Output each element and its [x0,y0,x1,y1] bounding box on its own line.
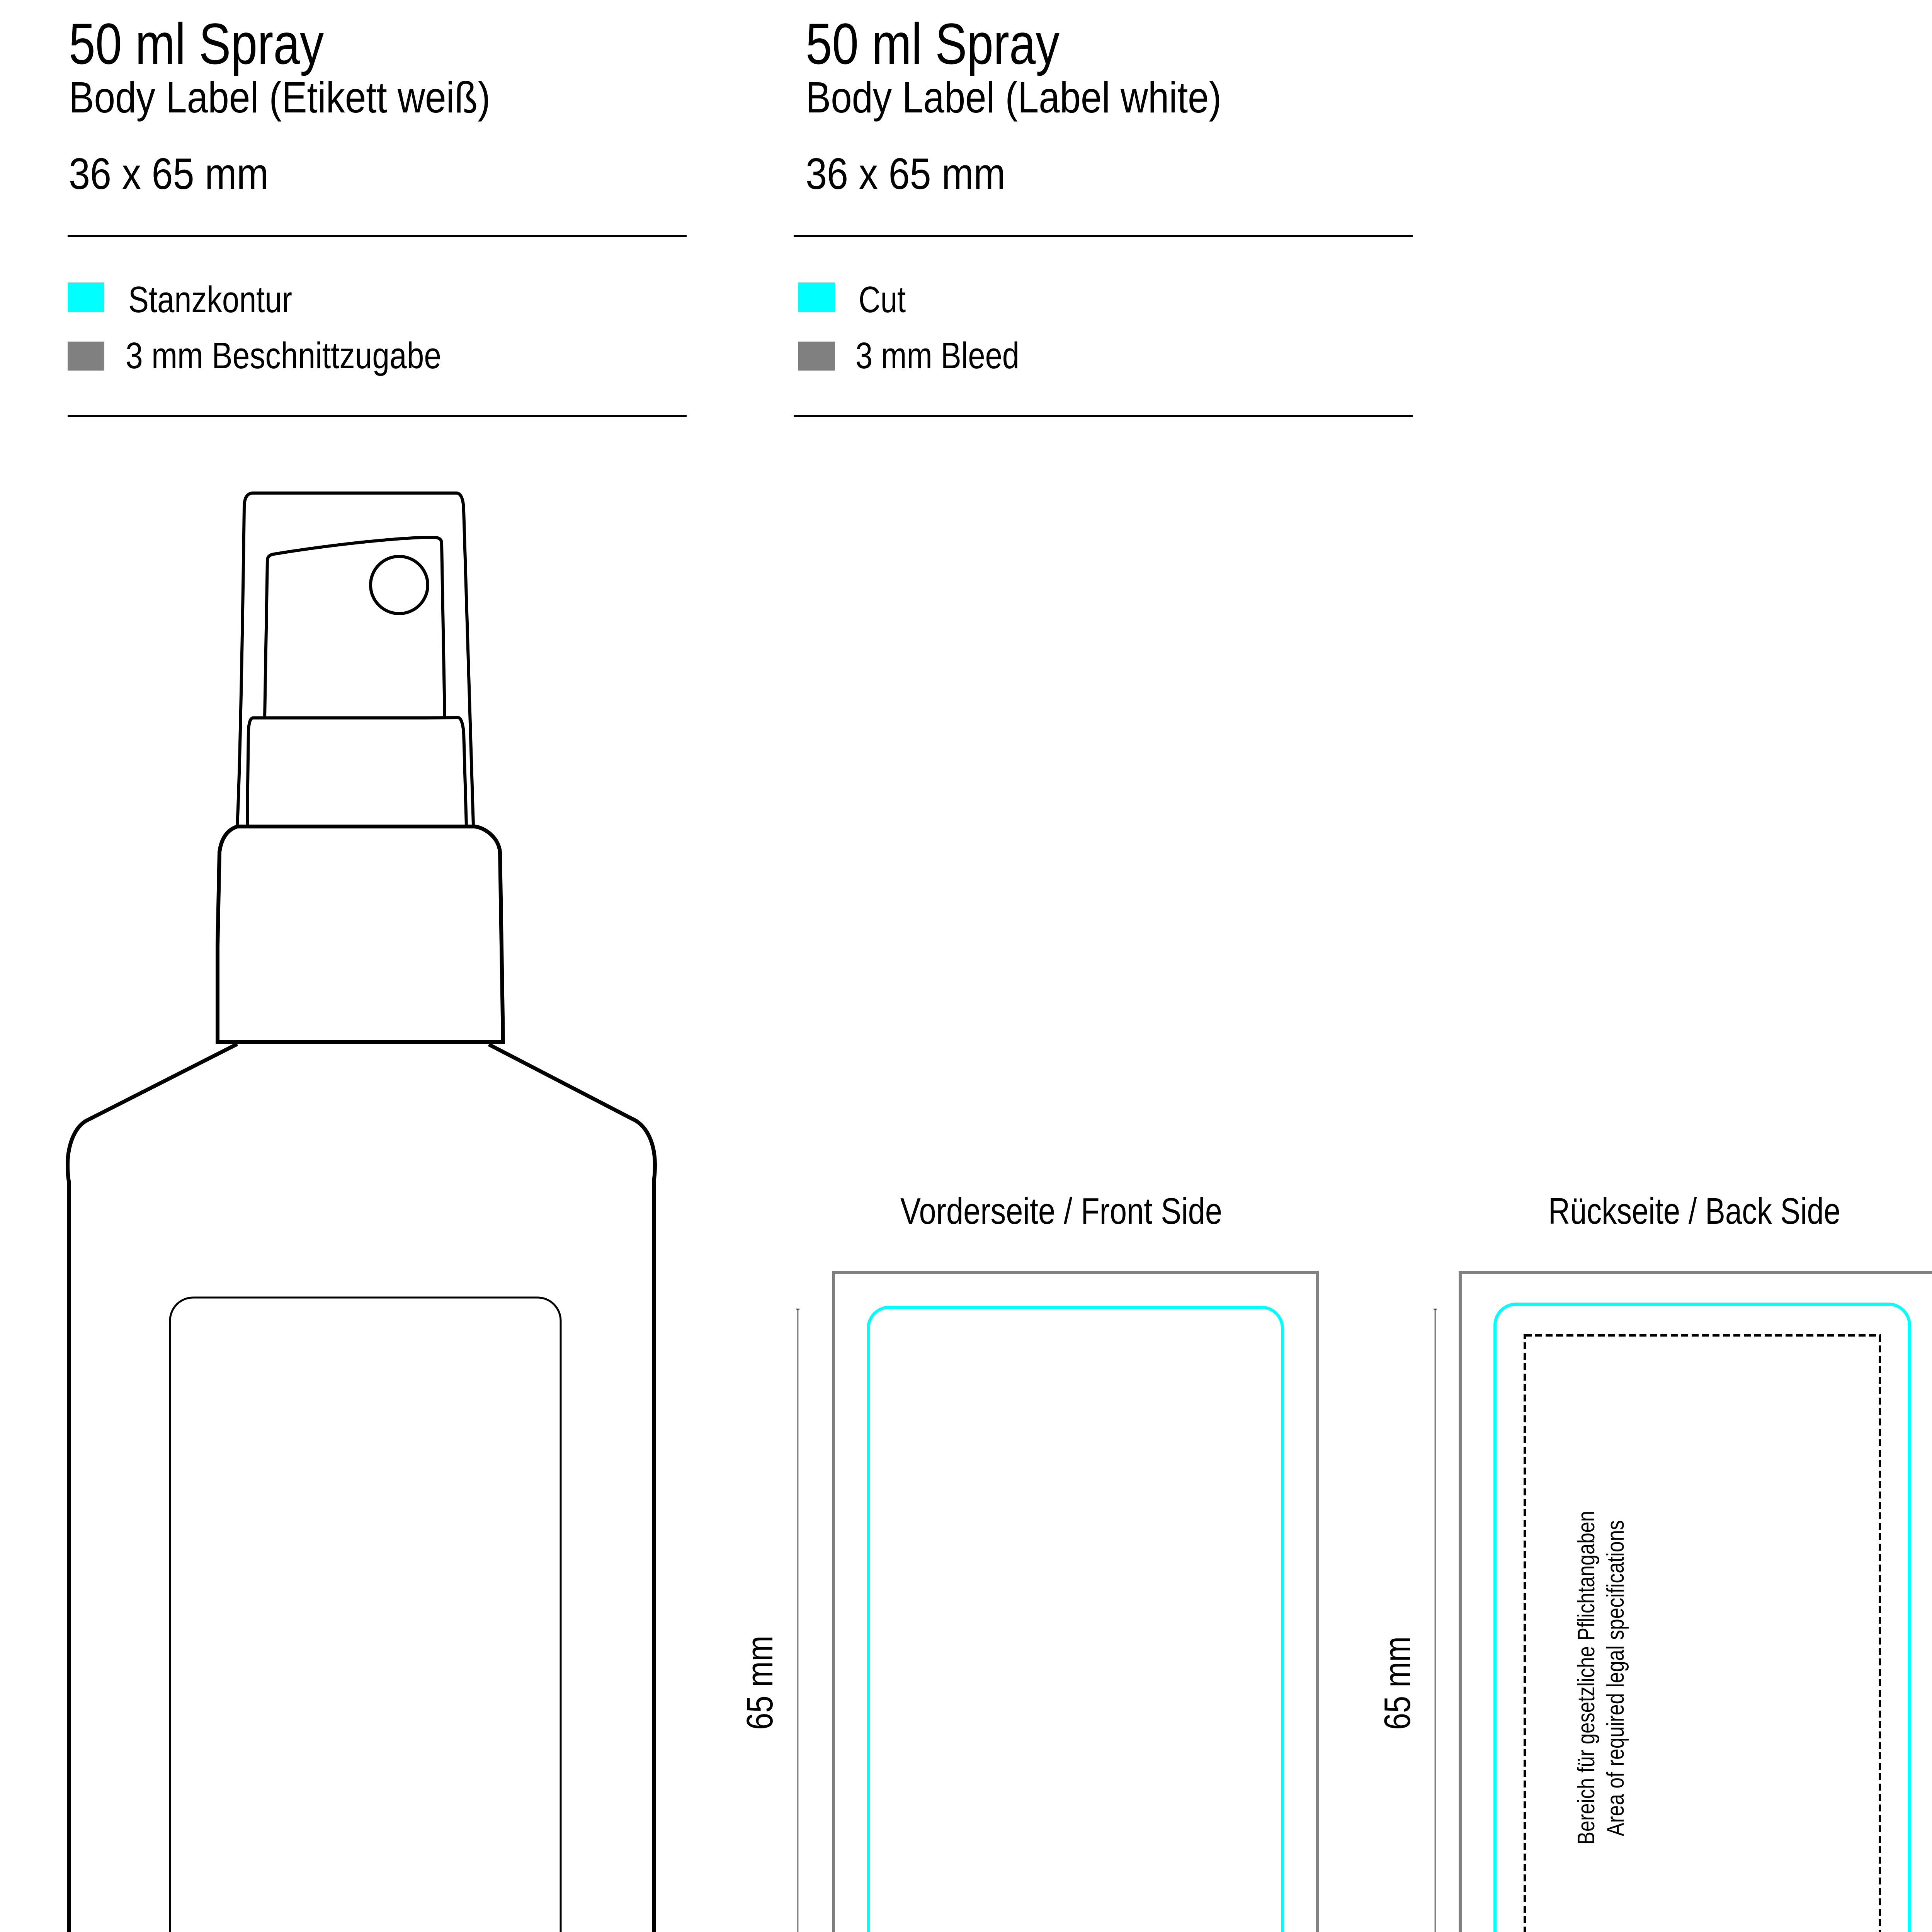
illustration: spray bottle [68,493,655,1932]
bleed outline [833,1272,1317,1932]
dimensions: 36 x 65 mm (German): 36 x 65 mm [69,150,269,199]
heading: Vorderseite / Front Side: Vorderseite / Front Side [900,1190,1222,1232]
height dimension line [796,1309,799,1932]
label area on bottle [170,1298,561,1932]
bleed outline [1460,1272,1932,1932]
title: 50 ml Spray (German): 50 ml Spray [69,11,324,76]
collar [248,718,466,826]
nozzle opening [371,556,428,614]
height label: 65 mm [1377,1636,1418,1730]
dimensions: 36 x 65 mm (English): 36 x 65 mm [806,150,1005,199]
legend text: 3 mm Bleed: 3 mm Bleed [855,335,1019,376]
legal area label: English: Area of required legal specifications [1602,1520,1629,1836]
title: 50 ml Spray (English): 50 ml Spray [806,11,1060,76]
legend icon: cut swatch [798,282,835,312]
cut contour [868,1307,1282,1932]
panel: back side template [1377,1190,1932,1932]
subtitle: Body Label (Etikett weiß): Body Label (Etikett weiß) [69,73,490,122]
subtitle: Body Label (Label white): Body Label (Label white) [806,73,1221,122]
legend text: Stanzkontur: Stanzkontur [128,279,292,320]
legend icon: bleed swatch [798,342,835,371]
spray head outer shell [237,493,473,825]
heading: Rückseite / Back Side: Rückseite / Back Side [1548,1190,1840,1232]
bottle body [68,1044,655,1932]
panel: German header [68,11,687,417]
height dimension line [1434,1309,1437,1932]
legal specification area (dashed) [1525,1335,1880,1932]
legend icon: bleed swatch [68,342,104,371]
cut contour [1495,1304,1910,1932]
panel: English header [794,11,1413,417]
legend text: 3 mm Beschnittzugabe: 3 mm Beschnittzugabe [126,335,441,376]
height label: 65 mm [739,1636,781,1730]
legend icon: cut swatch [68,282,104,312]
panel: front side template [739,1190,1317,1932]
legend text: Cut: Cut [859,279,906,320]
nozzle [265,537,445,718]
screw cap [218,827,503,1042]
legal area label: German: Bereich für gesetzliche Pflichtangaben [1573,1511,1600,1845]
